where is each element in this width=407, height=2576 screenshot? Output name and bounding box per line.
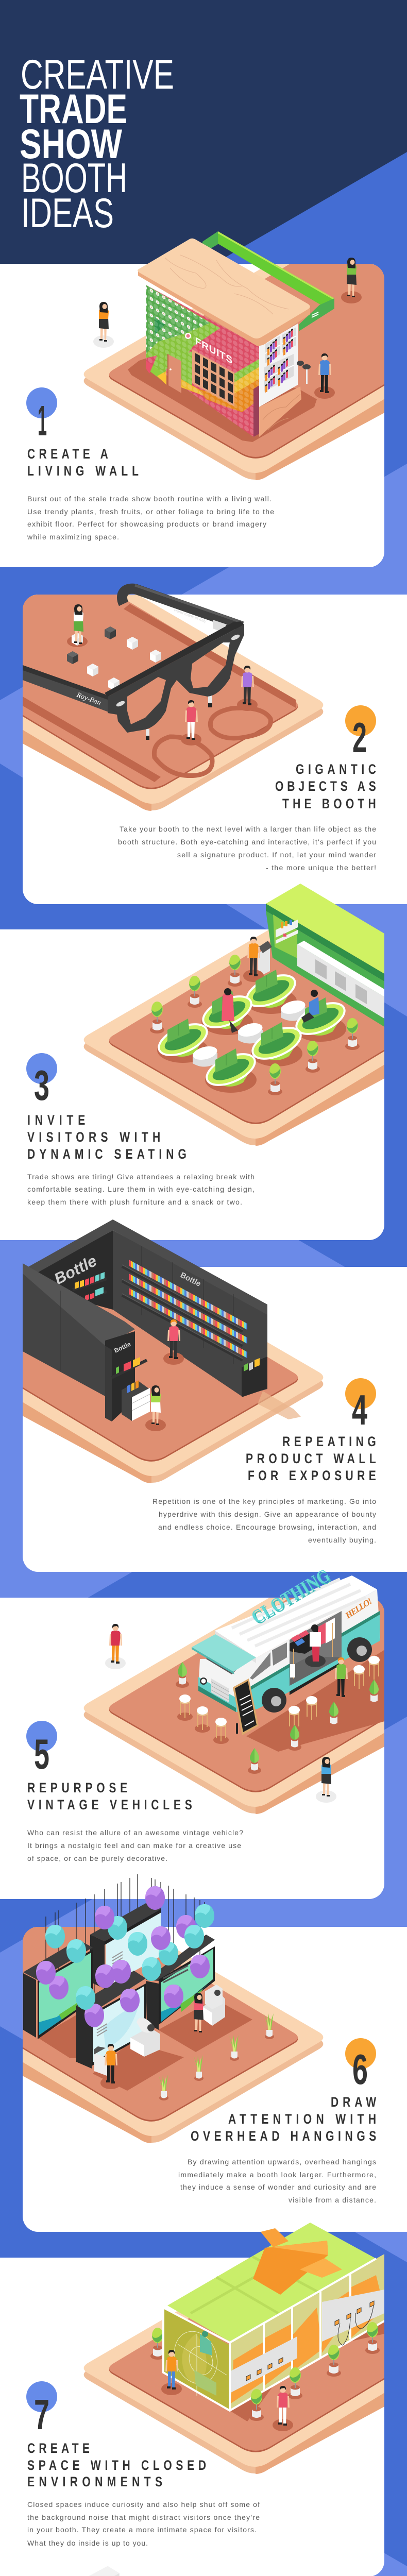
text HELLO: HELLO! bbox=[343, 1596, 374, 1621]
shopper in green bbox=[335, 1657, 348, 1697]
number 7: 7 bbox=[34, 2391, 49, 2438]
number 1: 1 bbox=[38, 397, 47, 445]
person in red bbox=[188, 1993, 209, 2039]
heading 1: CREATE A bbox=[27, 447, 108, 462]
title: TRADE bbox=[20, 86, 127, 132]
text 6: By drawing attention upwards, overhead hangings bbox=[188, 2158, 376, 2166]
heading 6: OVERHEAD HANGINGS bbox=[191, 2129, 376, 2144]
fruit living wall bbox=[146, 285, 259, 437]
number 4 bbox=[345, 1378, 376, 1434]
person in blue bbox=[316, 1757, 336, 1803]
text 3: keep them there with plush furniture and a snack or two. bbox=[27, 1198, 242, 1206]
text 4: Repetition is one of the key principles of marketing. Go into bbox=[152, 1497, 376, 1505]
text 1: while maximizing space. bbox=[27, 533, 119, 541]
number 2: 2 bbox=[352, 714, 367, 761]
person in red bbox=[181, 700, 201, 745]
hanging balloons bbox=[36, 1886, 214, 2027]
front partition wall: Bottle bbox=[113, 1341, 132, 1354]
text 5: It brings a nostalgic feel and can make for a creative use bbox=[27, 1841, 241, 1850]
wooden roof bbox=[138, 239, 310, 346]
text 7 bbox=[27, 2500, 260, 2547]
heading 5 bbox=[27, 1781, 192, 1813]
brand wall PHILIPS bbox=[33, 2566, 120, 2576]
panel: idea 6 white card bbox=[23, 1927, 407, 2232]
title bbox=[20, 52, 174, 236]
platform 4 bbox=[23, 1304, 324, 1483]
right end counter bbox=[242, 1357, 267, 1397]
shop interior bbox=[290, 1611, 342, 1686]
text 4: and endless choice. Encourage browsing, interaction, and bbox=[158, 1523, 376, 1531]
heading 3 bbox=[27, 1113, 186, 1162]
left shelves bbox=[73, 1272, 107, 1302]
heading 2: GIGANTIC bbox=[296, 762, 376, 777]
spiky plants bbox=[159, 2013, 274, 2100]
van roof bbox=[215, 1575, 377, 1663]
kiosk and staff bbox=[243, 937, 272, 982]
number 1 bbox=[26, 387, 57, 445]
heading 2 bbox=[275, 762, 376, 812]
platform 3 bbox=[84, 929, 407, 1146]
screen unit right bbox=[146, 1935, 215, 2030]
person in orange bbox=[93, 302, 114, 348]
text 3: comfortable seating. Lure them in with eye-catching design, bbox=[27, 1185, 255, 1193]
illustration: swooping panels booth bbox=[33, 2566, 299, 2576]
heading 7: ENVIRONMENTS bbox=[27, 2475, 162, 2490]
text 1: exhibit floor. Perfect for showcasing products or brand imagery bbox=[27, 520, 266, 528]
person in green bbox=[341, 258, 362, 303]
number 5 bbox=[26, 1721, 57, 1778]
text 7: in your booth. They create a more intimate space for visitors. bbox=[27, 2526, 257, 2534]
illustration: giant glasses booth bbox=[23, 585, 258, 745]
platform 7 bbox=[83, 2311, 384, 2474]
hanging strings back bbox=[46, 1874, 205, 2004]
shopper red top bbox=[163, 1319, 184, 1365]
product shelves bbox=[122, 1263, 247, 1360]
heading 7: SPACE WITH CLOSED bbox=[27, 2458, 206, 2473]
orange panels bbox=[231, 2275, 384, 2403]
text 2: booth structure. Both eye-catching and interactive, it's perfect if you bbox=[118, 838, 376, 846]
lower temple arm: Ray-Ban bbox=[75, 691, 102, 707]
heading 5: REPURPOSE bbox=[27, 1781, 127, 1796]
illustration: bottle wall booth bbox=[23, 1219, 267, 1431]
person with backpack bbox=[273, 2386, 293, 2431]
number 2 bbox=[345, 705, 376, 761]
awning bbox=[192, 1634, 256, 1674]
person in orange bbox=[161, 2350, 182, 2395]
shelving side wall bbox=[259, 324, 301, 437]
illustration: living wall booth bbox=[93, 231, 362, 442]
front partition wall bbox=[23, 1263, 147, 1421]
screen unit left bbox=[23, 1940, 93, 2039]
text 4 bbox=[152, 1497, 376, 1544]
text 7: the background noise that might distract visitors once they're bbox=[27, 2513, 260, 2521]
text 6: they induce a sense of wonder and curiosity and are bbox=[180, 2183, 376, 2191]
platform 1 bbox=[84, 264, 407, 480]
potted trees bbox=[249, 2322, 380, 2421]
sign CLOTHING: CLOTHING bbox=[248, 1565, 333, 1628]
panel: idea 1 white card bbox=[0, 264, 384, 567]
glass roof bbox=[163, 2223, 384, 2411]
seated woman bbox=[68, 604, 89, 650]
text 2: - the more unique the better! bbox=[266, 863, 376, 872]
heading 4: REPEATING bbox=[282, 1434, 376, 1450]
heading 1: LIVING WALL bbox=[27, 464, 139, 479]
shopper green top bbox=[145, 1385, 166, 1431]
heading 5: VINTAGE VEHICLES bbox=[27, 1798, 192, 1813]
grey display racks bbox=[231, 2290, 384, 2393]
text 2 bbox=[118, 825, 376, 872]
text 6 bbox=[178, 2158, 376, 2204]
heading 2: OBJECTS AS bbox=[275, 779, 376, 794]
title: BOOTH bbox=[21, 155, 127, 201]
lower temple arm bbox=[23, 665, 111, 713]
glasses frame bbox=[105, 621, 244, 733]
text 3: Trade shows are tiring! Give attendees a relaxing break with bbox=[27, 1173, 255, 1181]
sofas and tables bbox=[155, 969, 349, 1093]
sign CLOTHING: CLOTHING bbox=[249, 1566, 335, 1629]
text 1: Use trendy plants, fresh fruits, or other foliage to bring life to the bbox=[27, 507, 274, 516]
windows bbox=[206, 1642, 287, 1680]
heading 2: THE BOOTH bbox=[282, 796, 376, 812]
cone plants bbox=[176, 1662, 381, 1774]
illustration: vintage van bbox=[105, 1565, 382, 1803]
person with bag bbox=[100, 2044, 121, 2089]
title: SHOW bbox=[20, 121, 122, 167]
text 3 bbox=[27, 1173, 255, 1206]
stools bbox=[177, 1656, 382, 1744]
van body bbox=[198, 1589, 380, 1712]
text 5: of space, or can be purely decorative. bbox=[27, 1854, 167, 1862]
text 1: Burst out of the stale trade show booth routine with a living wall. bbox=[27, 495, 272, 503]
person in purple bbox=[237, 666, 258, 711]
title: CREATIVE bbox=[21, 52, 174, 98]
menu board bbox=[233, 1679, 259, 1735]
heading 4 bbox=[246, 1434, 376, 1484]
green back unit bbox=[266, 884, 384, 1027]
back walls bbox=[23, 1219, 267, 1396]
upper temple arm: Hand made in Italy bbox=[173, 607, 207, 624]
panel: idea 2 white card bbox=[23, 595, 407, 904]
panel: idea 5 white card bbox=[0, 1598, 384, 1899]
heading 6 bbox=[191, 2095, 376, 2144]
text 5 bbox=[27, 1828, 243, 1862]
panel: idea 3 white card bbox=[0, 929, 384, 1240]
cabinet bbox=[122, 1380, 150, 1421]
window grid bbox=[192, 349, 234, 406]
panel: idea 4 white card bbox=[23, 1267, 407, 1572]
heading 4: PRODUCT WALL bbox=[246, 1451, 376, 1467]
illustration: dynamic seating lounge bbox=[150, 884, 384, 1095]
green frame structure bbox=[202, 231, 334, 331]
washer on pedestal bbox=[202, 1985, 225, 2026]
heading 3: INVITE bbox=[27, 1113, 85, 1128]
heading 6: DRAW bbox=[331, 2095, 376, 2110]
text 6: immediately make a booth look larger. Furthermore, bbox=[178, 2171, 376, 2179]
text 4: eventually buying. bbox=[308, 1536, 376, 1544]
illustration: closed environment booth bbox=[150, 2223, 384, 2431]
number 5: 5 bbox=[34, 1730, 49, 1778]
stools bbox=[297, 361, 311, 384]
heading 6: ATTENTION WITH bbox=[228, 2112, 376, 2127]
heading 4: FOR EXPOSURE bbox=[248, 1468, 376, 1484]
text 4: hyperdrive with this design. Give an appearance of bounty bbox=[159, 1510, 376, 1518]
wall sign Bottle bbox=[51, 1251, 202, 1289]
number 6 bbox=[345, 2038, 376, 2093]
title: IDEAS bbox=[21, 190, 114, 236]
glasses legs bbox=[146, 693, 212, 740]
airplane sculpture bbox=[253, 2228, 342, 2295]
wall sign Bottle: Bottle bbox=[51, 1251, 99, 1288]
illustration: overhead hangings bbox=[23, 1874, 274, 2100]
screen unit back bbox=[90, 1903, 161, 1989]
text 7: Closed spaces induce curiosity and also help shut off some of bbox=[27, 2500, 260, 2509]
number 6: 6 bbox=[352, 2045, 368, 2093]
screen unit front bbox=[76, 1971, 146, 2069]
potted trees bbox=[150, 955, 360, 1095]
cube seats bbox=[67, 626, 161, 690]
number 4: 4 bbox=[352, 1386, 367, 1434]
plant behind bbox=[150, 2328, 162, 2360]
number 7 bbox=[26, 2381, 57, 2438]
person in red vest bbox=[105, 1624, 126, 1669]
platform 5 bbox=[84, 1598, 407, 1814]
sign CLOTHING bbox=[252, 1570, 331, 1623]
platform 2 bbox=[0, 595, 323, 811]
heading 3: VISITORS WITH bbox=[27, 1130, 160, 1145]
seated visitors bbox=[222, 988, 319, 1033]
text 5: Who can resist the allure of an awesome vintage vehicle? bbox=[27, 1828, 243, 1837]
number 3: 3 bbox=[34, 1061, 49, 1109]
scanner on pedestal bbox=[130, 2018, 160, 2057]
text 2: sell a signature product. If not, let your mind wander bbox=[177, 851, 376, 859]
wall sign FRUITS: FRUITS bbox=[195, 335, 232, 366]
heading 7: CREATE bbox=[27, 2441, 90, 2456]
wall sign Bottle: Bottle bbox=[179, 1270, 202, 1289]
heading 7 bbox=[27, 2441, 206, 2490]
person in blue bbox=[314, 353, 335, 399]
upper temple arm bbox=[122, 585, 242, 632]
panel: idea 7 white card bbox=[0, 2258, 384, 2576]
text 7: What they do inside is up to you. bbox=[27, 2539, 148, 2547]
text 1 bbox=[27, 495, 274, 541]
kiosk with laptop bbox=[94, 2046, 108, 2076]
side glass wall bbox=[230, 2254, 384, 2411]
text 2: Take your booth to the next level with a larger than life object as the bbox=[120, 825, 376, 833]
platform 6 bbox=[0, 1927, 323, 2143]
heading 1 bbox=[27, 447, 139, 479]
front glass wall bbox=[163, 2308, 230, 2411]
navy header background bbox=[0, 0, 407, 264]
heading 3: DYNAMIC SEATING bbox=[27, 1147, 186, 1162]
text 6: visible from a distance. bbox=[289, 2196, 376, 2204]
number 3 bbox=[26, 1053, 57, 1109]
van wheels bbox=[262, 1637, 372, 1713]
